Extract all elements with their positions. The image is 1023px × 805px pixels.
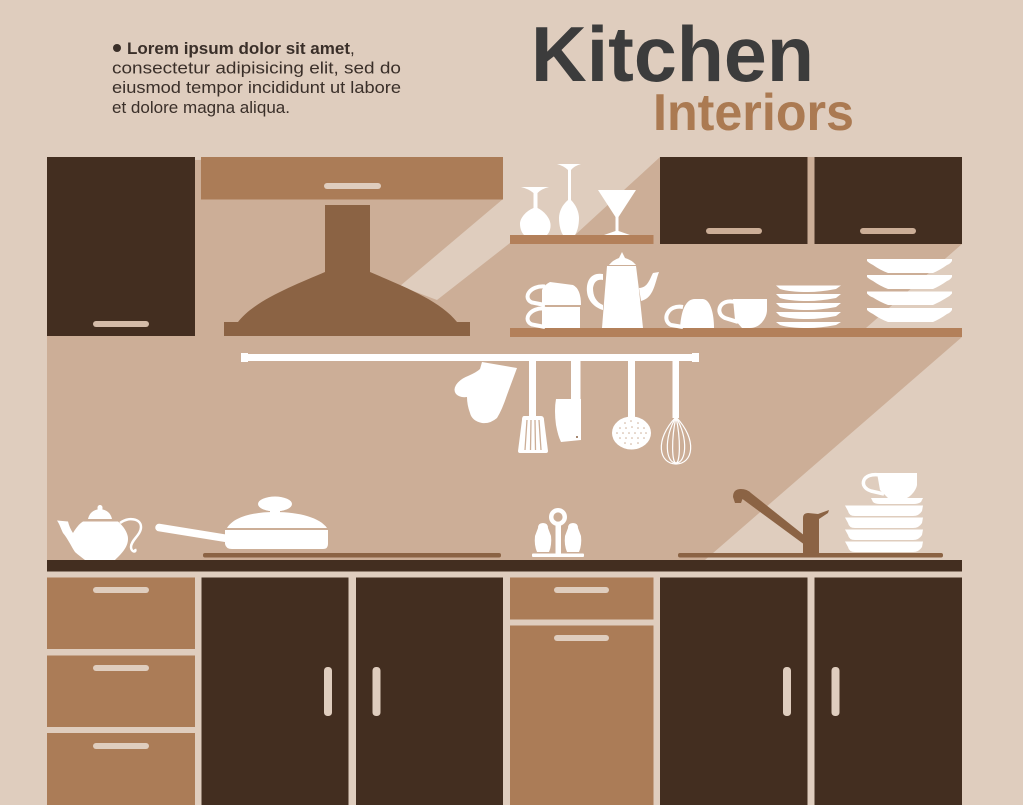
base drawer three [47,733,195,805]
icon: cleaver [555,361,581,442]
intro text block: et dolore magna aliqua. [112,98,290,117]
sink bar [678,553,943,558]
icon: deep plate stack [867,259,952,322]
icon: inverted wine glass [520,187,551,235]
upper right cabinet two [814,157,962,244]
icon: faucet [733,489,829,557]
upper left cabinet [47,157,195,336]
icon: salt and pepper set [532,510,584,557]
icon: upside-down cup [666,299,714,328]
extractor hood [224,205,470,336]
icon: lidded pan [159,496,328,549]
icon: martini glass [598,190,636,235]
icon: coffee pot [587,252,659,328]
centre drawer [510,578,654,620]
icon: stacked cups [528,282,581,328]
title: Kitchen [531,10,814,98]
icon: upright cup [719,299,767,328]
base door three [660,578,808,805]
small shelf [510,235,654,244]
intro text block: consectetur adipisicing elit, sed do [112,58,401,78]
base door two [356,578,503,805]
icon: thin plate stack [776,286,841,328]
centre tall door [510,626,654,805]
base drawer one [47,578,195,649]
icon: skimmer ladle [612,361,651,450]
base door one [202,578,348,805]
long shelf [510,328,962,337]
utensil rail [241,353,699,362]
icon: cup and plate stack [845,473,923,552]
title: Interiors [653,84,854,142]
icon: whisk [661,361,691,464]
cooktop bar [203,553,501,558]
base drawer two [47,656,195,727]
icon: oven mitt [454,362,517,423]
upper right cabinet one [660,157,808,244]
long wall shadow [47,157,962,560]
intro text block: Lorem ipsum dolor sit amet [127,39,350,58]
intro text block: eiusmod tempor incididunt ut labore [112,78,401,97]
title [531,10,854,142]
base door four [814,578,962,805]
icon: spatula [518,361,548,453]
icon: teapot [57,505,141,560]
intro text block: , [350,39,355,58]
intro text block [112,39,401,117]
icon: inverted flute [557,164,581,235]
countertop [47,560,962,572]
hood cabinet [201,157,503,200]
